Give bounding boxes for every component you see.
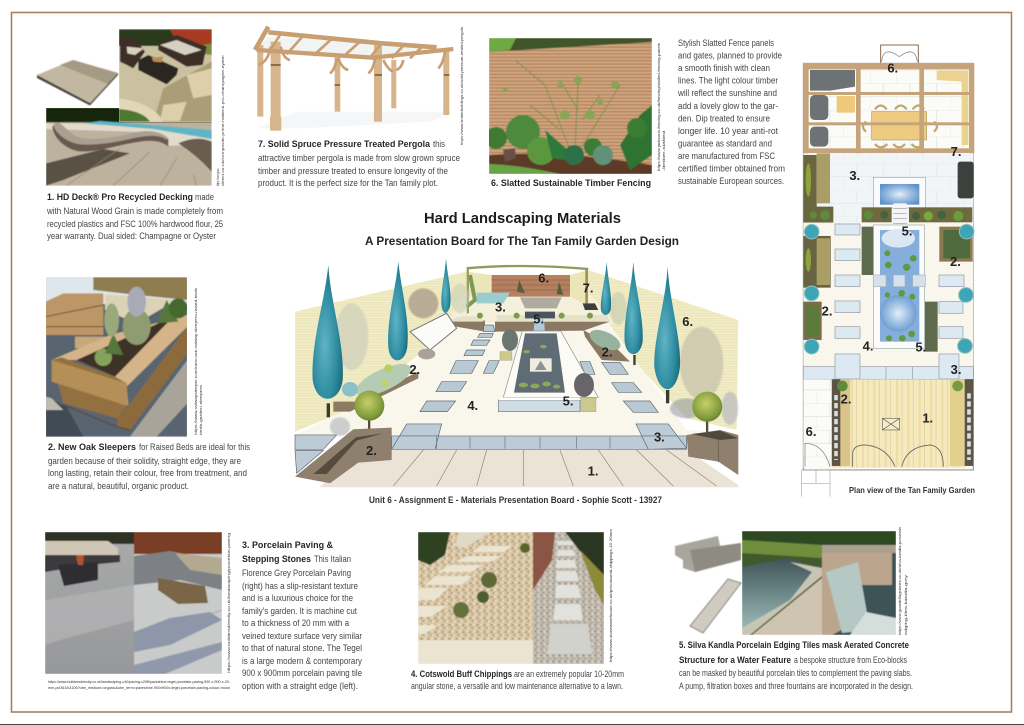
callout numbers on perspective: 2. [409, 362, 420, 377]
callout numbers on perspective: 4. [467, 398, 478, 413]
photo: decking tile sample [37, 60, 118, 106]
callout numbers on perspective: 3. [654, 430, 665, 445]
caption: decking: year warranty. Dual sided: Champagne or Oyster [47, 231, 216, 241]
callout numbers on perspective: 2. [366, 443, 377, 458]
subtitle: A Presentation Board for The Tan Family Garden Design [365, 234, 679, 248]
caption: sleepers: for Raised Beds are ideal for this [139, 442, 250, 452]
caption: porcelain paving: This Italian [314, 554, 351, 564]
caption: porcelain paving: (right) has a slip-resistant texture [242, 581, 358, 591]
source link: https://www.gocs- [216, 168, 220, 186]
title: Hard Landscaping Materials [424, 210, 621, 227]
caption: water feature: Structure for a Water Feature [679, 655, 791, 666]
callout numbers on plan: 3. [951, 362, 961, 377]
caption: decking: 1. HD Deck® Pro Recycled Decking [47, 192, 193, 203]
caption: water feature: 5. Silva Kandla Porcelain Edging Tiles mask Aerated Concrete [679, 640, 909, 651]
callout numbers on perspective: 6. [682, 314, 693, 329]
callout numbers on plan: 5. [902, 224, 912, 239]
callout numbers on plan: 6. [887, 61, 898, 76]
caption: unit and author: Unit 6 - Assignment E - Materials Presentation Board - Sophie Scott - 13927 [369, 495, 662, 505]
caption: sleepers: are a natural, beautiful, organic product. [48, 481, 189, 491]
text block: fencing description: will reflect the sunshine and [677, 88, 777, 98]
panel: decking: direct.co.uk/composite-prime-hddeck-pro-champagne-oyster [221, 54, 225, 186]
panel: pergola [255, 27, 464, 188]
source link: https://www.grandeflagstones.co.uk/silva-kandla-porcelain [898, 527, 902, 635]
panel: fencing: -timber-slatted [662, 131, 666, 171]
text block: fencing description: lines. The light colour timber [678, 76, 778, 86]
text block: fencing description: longer life. 10 year anti-rot [678, 126, 778, 136]
callout numbers on plan: 5. [915, 340, 926, 355]
text block: fencing description: certified timber obtained from [678, 164, 785, 174]
caption: decking: made [195, 192, 214, 202]
source link horizontal: mm-pcl361/s3106?utm_medium=organic&utm_term=paveshine-900x900x-tegel-porcelain-paving-colour-moon [48, 686, 230, 690]
caption: porcelain paving: 900 x 900mm porcelain paving tile [242, 668, 362, 678]
caption: porcelain paving: Stepping Stones [242, 554, 311, 565]
callout numbers on perspective: 3. [495, 300, 506, 315]
source link: https://www.railwaysleeper.com/new-oak-railway-sleepers-raised-beds [194, 288, 198, 435]
source link: https://www.timberbuildings.co.uk/solid-pressure-treated-pergola [460, 27, 464, 145]
perspective drawing of garden [295, 258, 738, 487]
source link: https://www.jacksons-fencing.co.uk/fencing/slatted-fencing-panels [657, 43, 661, 171]
text block: fencing description: Stylish Slatted Fence panels [678, 38, 774, 48]
caption: pergola: product. It is the perfect size for the Tan family plot. [258, 178, 438, 188]
caption: pergola: timber and pressure treated to ensure longevity of the [258, 166, 448, 176]
callout numbers on plan: 2. [950, 254, 961, 269]
caption: sleepers [48, 442, 250, 491]
caption: porcelain paving: Florence Grey Porcelain Paving [242, 568, 351, 578]
photo: lounger beside pool on deck [46, 108, 212, 186]
caption: porcelain paving: veined texture surface very similar [242, 631, 362, 641]
caption: porcelain paving: to that of natural stone. The Tegel [242, 643, 362, 653]
caption: porcelain paving: family's garden. It is machine cut [242, 606, 357, 616]
text block: fencing description: sustainable European sources. [678, 176, 784, 186]
callout numbers on plan: 7. [951, 144, 961, 159]
photo: aerated concrete blocks and edging tile [675, 536, 741, 633]
caption: water feature: A pump, filtration boxes and three fountains are incorporated in the design. [679, 681, 913, 691]
source link horizontal [48, 680, 230, 690]
callout numbers on plan: 4. [863, 339, 874, 354]
callout numbers on perspective: 2. [602, 345, 612, 360]
caption: water feature: a bespoke structure from Eco-blocks [794, 655, 907, 665]
caption: chippings: angular stone, a versatile and low maintenance alternative to a lawn. [411, 681, 623, 691]
source link: https://www.buildersdirectly.co.uk/landscaping/porcelain-paving [227, 533, 231, 673]
callout numbers on plan: 2. [841, 391, 852, 406]
photo: slatted timber fence [485, 38, 652, 174]
panel: cotswold chippings [411, 529, 624, 691]
source link: https://www.stonewarehouse.co.uk/pr/cotswold-chippings-10-20mm [609, 529, 613, 662]
panel: water feature: edging-tiles-kandla-grey [904, 574, 908, 635]
caption: porcelain paving: is a large modern & contemporary [242, 656, 362, 666]
caption: chippings [411, 669, 624, 691]
caption: porcelain paving [242, 540, 362, 691]
source link horizontal: https://www.buildersdirectly.co.uk/landscaping-c40/paving-c298/paveshine-tegel-porcelain-paving-900-x-900-x-20- [48, 680, 230, 684]
caption: chippings: are an extremely popular 10-20mm [514, 669, 624, 679]
caption: decking [46, 192, 223, 241]
caption: decking: recycled plastics and FSC 100% hardwood flour, 25 [47, 219, 223, 229]
callout numbers on perspective: 1. [588, 464, 598, 479]
callout numbers on perspective [366, 270, 693, 479]
caption: porcelain paving: to a thickness of 20 mm with a [242, 618, 349, 628]
panel: water feature [675, 527, 913, 691]
caption: plan view: Plan view of the Tan Family Garden [849, 486, 975, 495]
caption: pergola: this [433, 139, 445, 149]
callout numbers on perspective: 5. [533, 311, 544, 326]
plan view of garden [802, 45, 974, 497]
text block: fencing description: are manufactured from FSC [678, 151, 775, 161]
photo: porcelain paving patios [45, 532, 222, 674]
caption: sleepers: 2. New Oak Sleepers [48, 442, 136, 453]
callout numbers on perspective: 6. [538, 270, 549, 285]
caption: decking: with Natural Wood Grain is made completely from [46, 206, 223, 216]
caption: fencing title: 6. Slatted Sustainable Timber Fencing [491, 178, 651, 189]
caption: chippings: 4. Cotswold Buff Chippings [411, 669, 512, 680]
caption: porcelain paving: option with a straight edge (left). [242, 681, 358, 691]
panel: sleepers [46, 277, 250, 491]
caption: pergola [258, 139, 460, 188]
text block: fencing description: a smooth finish with clean [678, 63, 770, 73]
photo: pool and waterfall [742, 531, 896, 635]
caption: water feature [679, 640, 913, 691]
caption: sleepers: garden because of their solidity, straight edge, they are [48, 456, 241, 466]
callout numbers on plan: 1. [922, 411, 933, 426]
caption: porcelain paving: and is a luxurious choice for the [242, 593, 353, 603]
photo: timber pergola [255, 27, 453, 131]
panel: decking [37, 29, 225, 241]
caption: pergola: attractive timber pergola is made from slow grown spruce [258, 153, 460, 163]
text block: fencing description: guarantee as standard and [678, 138, 772, 148]
photo: patio seating on decking [119, 29, 212, 123]
text block: fencing description: den. Dip treated to ensure [678, 113, 770, 123]
caption: pergola: 7. Solid Spruce Pressure Treated Pergola [258, 139, 431, 150]
text block: fencing description: add a lovely glow to the gar- [678, 101, 778, 111]
caption: water feature: can be masked by beautiful porcelain tiles to complement the paving slabs. [679, 668, 912, 678]
caption: porcelain paving: 3. Porcelain Paving & [242, 540, 333, 551]
panel: sleepers: beds-garden-sleepers [199, 385, 203, 435]
caption: sleepers: long lasting, retain their colour, free from treatment, and [48, 468, 247, 478]
callout numbers on plan [806, 61, 961, 439]
callout numbers on plan: 2. [822, 304, 833, 319]
photo: chippings with stepping stones [418, 532, 604, 664]
photo: oak sleeper raised bed [46, 277, 188, 437]
callout numbers on perspective: 5. [563, 394, 573, 409]
panel: fencing [485, 38, 785, 189]
panel: porcelain paving [45, 532, 362, 691]
text block: fencing description [677, 38, 785, 186]
callout numbers on plan: 6. [806, 424, 817, 439]
callout numbers on perspective: 7. [583, 281, 593, 296]
callout numbers on plan: 3. [849, 168, 860, 183]
text block: fencing description: and gates, planned to provide [678, 51, 782, 61]
